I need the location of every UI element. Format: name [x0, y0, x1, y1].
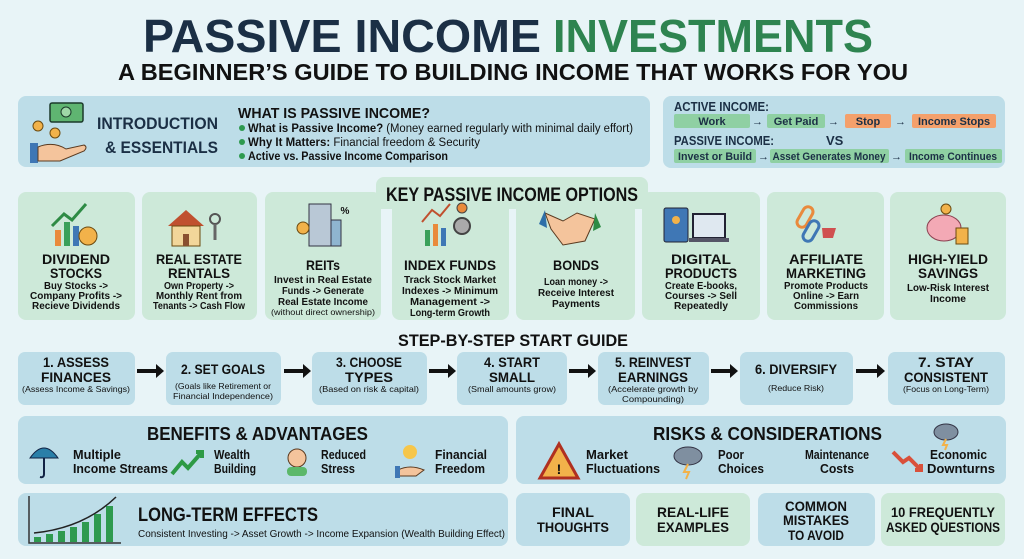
box: real-life examples: REAL-LIFE	[657, 504, 729, 520]
panel: active vs passive: →	[895, 116, 906, 128]
card: real estate rentals: RENTALS	[168, 265, 230, 281]
icon: storm cloud	[674, 447, 702, 479]
card: index funds: Indexes -> Minimum	[402, 286, 498, 297]
panel: benefits & advantages: Wealth	[214, 448, 250, 462]
card: affiliate marketing	[784, 205, 868, 312]
text block: what is passive income: Why It Matters: Financial freedom & Security	[248, 137, 480, 149]
card: reits: REITs	[306, 257, 340, 273]
card: index funds: INDEX FUNDS	[404, 257, 496, 273]
panel: active vs passive: PASSIVE INCOME:	[674, 133, 774, 148]
step 7: (Focus on Long-Term)	[903, 384, 989, 394]
card: reits: Invest in Real Estate	[274, 275, 372, 286]
step 3: (Based on risk & capital)	[319, 384, 419, 394]
card: reits: (without direct ownership)	[271, 307, 375, 317]
step 3: TYPES	[345, 369, 393, 385]
card: reits: Funds -> Generate	[282, 286, 364, 297]
card: real estate rentals	[153, 210, 245, 312]
box: real-life examples: EXAMPLES	[657, 519, 729, 535]
panel: risks & considerations: Market	[586, 448, 629, 462]
box: common mistakes: TO AVOID	[788, 527, 844, 543]
icon: growth chart	[29, 496, 121, 543]
panel: active vs passive: →	[891, 151, 902, 163]
panel: benefits & advantages: Freedom	[435, 462, 485, 476]
card: high-yield savings: SAVINGS	[918, 265, 978, 281]
step 5: 5. REINVEST	[615, 354, 691, 370]
card: dividend stocks: Buy Stocks ->	[44, 281, 108, 292]
text block: what is passive income: WHAT IS PASSIVE INCOME?	[238, 105, 430, 122]
panel: active vs passive: Income Stops	[918, 116, 990, 128]
card: reits	[271, 204, 375, 317]
panel: active vs passive: Get Paid	[774, 116, 818, 128]
panel: active vs passive: ACTIVE INCOME:	[674, 99, 769, 114]
card: affiliate marketing: AFFILIATE	[789, 251, 863, 267]
panel: benefits & advantages: Income Streams	[73, 462, 168, 476]
card: high-yield savings: HIGH-YIELD	[908, 251, 988, 267]
text block: what is passive income: Active vs. Passive Income Comparison	[248, 151, 448, 163]
step 4: SMALL	[489, 369, 535, 385]
panel: risks & considerations: Choices	[718, 462, 764, 476]
card: dividend stocks: Company Profits ->	[30, 291, 122, 302]
step 2: 2. SET GOALS	[181, 361, 265, 377]
panel: benefits & advantages: Building	[214, 462, 256, 476]
panel: long-term effects: Consistent Investing -> Asset Growth -> Income Expansion (Wealth Building Effect)	[138, 528, 505, 540]
card: index funds: Management ->	[410, 297, 490, 308]
panel: benefits & advantages	[18, 416, 508, 484]
icon: umbrella	[30, 448, 58, 477]
box: common mistakes: COMMON	[785, 498, 847, 514]
panel: introduction	[18, 96, 650, 167]
panel: benefits & advantages: Multiple	[73, 448, 121, 462]
box: final thoughts: FINAL	[552, 504, 594, 520]
card: bonds: BONDS	[553, 257, 599, 273]
box: faq	[881, 493, 1005, 546]
card: index funds	[402, 203, 498, 319]
card: bonds: Loan money ->	[544, 277, 608, 288]
card: real estate rentals: Tenants -> Cash Flow	[153, 301, 245, 312]
card: high-yield savings: Income	[930, 294, 966, 305]
panel: active vs passive: Invest or Build	[678, 151, 752, 163]
panel: risks & considerations: RISKS & CONSIDERATIONS	[653, 424, 882, 444]
icon: warning: !	[557, 461, 561, 477]
box: faq: 10 FREQUENTLY	[891, 504, 996, 520]
title	[143, 10, 873, 62]
step 2: (Goals like Retirement or	[175, 381, 271, 391]
steps row	[18, 352, 1005, 405]
panel: risks & considerations: Economic	[930, 448, 987, 462]
card: dividend stocks: Recieve Dividends	[32, 301, 120, 312]
step 3	[319, 354, 419, 394]
box: common mistakes	[758, 493, 875, 546]
panel: active vs passive: Income Continues	[909, 151, 997, 163]
panel: key passive income options cards	[18, 177, 1006, 320]
heading: introduction & essentials: INTRODUCTION	[97, 114, 218, 133]
card: real estate rentals: Monthly Rent from	[156, 291, 242, 302]
text block: what is passive income	[238, 105, 633, 163]
panel: active vs passive: Work	[698, 116, 727, 128]
step 1: FINANCES	[41, 369, 111, 385]
panel: benefits & advantages: Financial	[435, 448, 487, 462]
card: affiliate marketing: MARKETING	[786, 265, 866, 281]
step 6: (Reduce Risk)	[768, 383, 824, 393]
text block: what is passive income: What is Passive Income? (Money earned regularly with minimal daily effort)	[248, 123, 633, 135]
panel: active vs passive: →	[752, 116, 763, 128]
card: digital products: Courses -> Sell	[665, 291, 737, 302]
step 1	[22, 354, 130, 394]
arrows between steps	[137, 364, 885, 378]
icon: growth arrow	[172, 452, 202, 474]
heading: introduction & essentials	[97, 114, 218, 157]
card: dividend stocks: DIVIDEND	[42, 251, 110, 267]
step 5	[608, 354, 699, 404]
icon: money hand	[30, 103, 86, 163]
card: dividend stocks: STOCKS	[50, 265, 102, 281]
card: affiliate marketing: Commissions	[794, 301, 858, 312]
card: bonds: Receive Interest	[538, 288, 615, 299]
panel: active vs passive	[663, 96, 1005, 168]
card: index funds: Track Stock Market	[404, 275, 497, 286]
card: bonds	[538, 210, 615, 310]
card: digital products: Create E-books,	[665, 281, 737, 292]
panel: risks & considerations: Downturns	[927, 462, 995, 476]
icon: cloud	[934, 424, 958, 450]
panel: active vs passive: Asset Generates Money	[772, 151, 886, 163]
box: faq: ASKED QUESTIONS	[886, 519, 1000, 535]
box: final thoughts: THOUGHTS	[537, 519, 609, 535]
panel: risks & considerations: Fluctuations	[586, 462, 660, 476]
card: reits: Real Estate Income	[278, 297, 368, 308]
card: digital products: PRODUCTS	[665, 265, 737, 281]
card: real estate rentals: Own Property ->	[164, 281, 234, 292]
card: digital products: DIGITAL	[671, 251, 731, 267]
step 5: EARNINGS	[618, 369, 688, 385]
card: high-yield savings: Low-Risk Interest	[907, 283, 990, 294]
card: dividend stocks	[30, 204, 122, 312]
card: bonds: Payments	[552, 299, 600, 310]
panel: risks & considerations: Maintenance	[805, 448, 869, 462]
step 7: CONSISTENT	[904, 369, 988, 385]
panel: active vs passive: →	[758, 151, 769, 163]
box: final thoughts	[516, 493, 630, 546]
panel: active vs passive: Stop	[856, 116, 880, 128]
step 7	[903, 354, 989, 394]
step 2	[173, 361, 273, 401]
box: common mistakes: MISTAKES	[783, 512, 849, 528]
panel: risks & considerations	[516, 416, 1006, 484]
subtitle: A BEGINNER’S GUIDE TO BUILDING INCOME THAT WORKS FOR YOU	[118, 59, 908, 85]
icon: happy face	[287, 449, 307, 476]
step 3: 3. CHOOSE	[336, 354, 402, 370]
card: reits: %	[341, 206, 350, 217]
heading: key passive income options: KEY PASSIVE INCOME OPTIONS	[386, 185, 638, 206]
step 6: 6. DIVERSIFY	[755, 361, 838, 377]
panel: active vs passive: →	[828, 116, 839, 128]
step 4: (Small amounts grow)	[468, 384, 556, 394]
icon: warning	[540, 444, 578, 478]
card: affiliate marketing: Promote Products	[784, 281, 868, 292]
panel: long-term effects: LONG-TERM EFFECTS	[138, 505, 318, 526]
card: high-yield savings	[907, 204, 990, 305]
heading: step-by-step start guide: STEP-BY-STEP START GUIDE	[398, 331, 628, 350]
panel: long-term effects	[18, 493, 508, 546]
title: PASSIVE INCOME	[143, 10, 541, 62]
panel: benefits & advantages: Reduced	[321, 448, 366, 462]
panel: benefits & advantages: Stress	[321, 462, 355, 476]
step 4: 4. START	[484, 354, 540, 370]
step 5: (Accelerate growth by	[608, 384, 699, 394]
card: index funds: Long-term Growth	[410, 308, 490, 319]
step 6	[755, 361, 838, 393]
card: real estate rentals: REAL ESTATE	[156, 251, 242, 267]
box: real-life examples	[636, 493, 750, 546]
icon: downturn arrow	[893, 452, 921, 470]
heading: introduction & essentials: & ESSENTIALS	[105, 138, 218, 157]
panel: risks & considerations: Poor	[718, 448, 744, 462]
panel: active vs passive: VS	[826, 133, 844, 148]
step 5: Compounding)	[622, 394, 684, 404]
card: digital products	[664, 208, 737, 312]
panel: benefits & advantages: BENEFITS & ADVANTAGES	[147, 424, 368, 444]
step 1: 1. ASSESS	[43, 354, 109, 370]
title: INVESTMENTS	[553, 10, 873, 62]
step 1: (Assess Income & Savings)	[22, 384, 130, 394]
card: affiliate marketing: Online -> Earn	[793, 291, 859, 302]
panel: risks & considerations: Costs	[820, 462, 854, 476]
step 4	[468, 354, 556, 394]
icon: sun over hand	[395, 445, 424, 478]
card: digital products: Repeatedly	[674, 301, 728, 312]
step 7: 7. STAY	[918, 354, 975, 370]
step 2: Financial Independence)	[173, 391, 273, 401]
